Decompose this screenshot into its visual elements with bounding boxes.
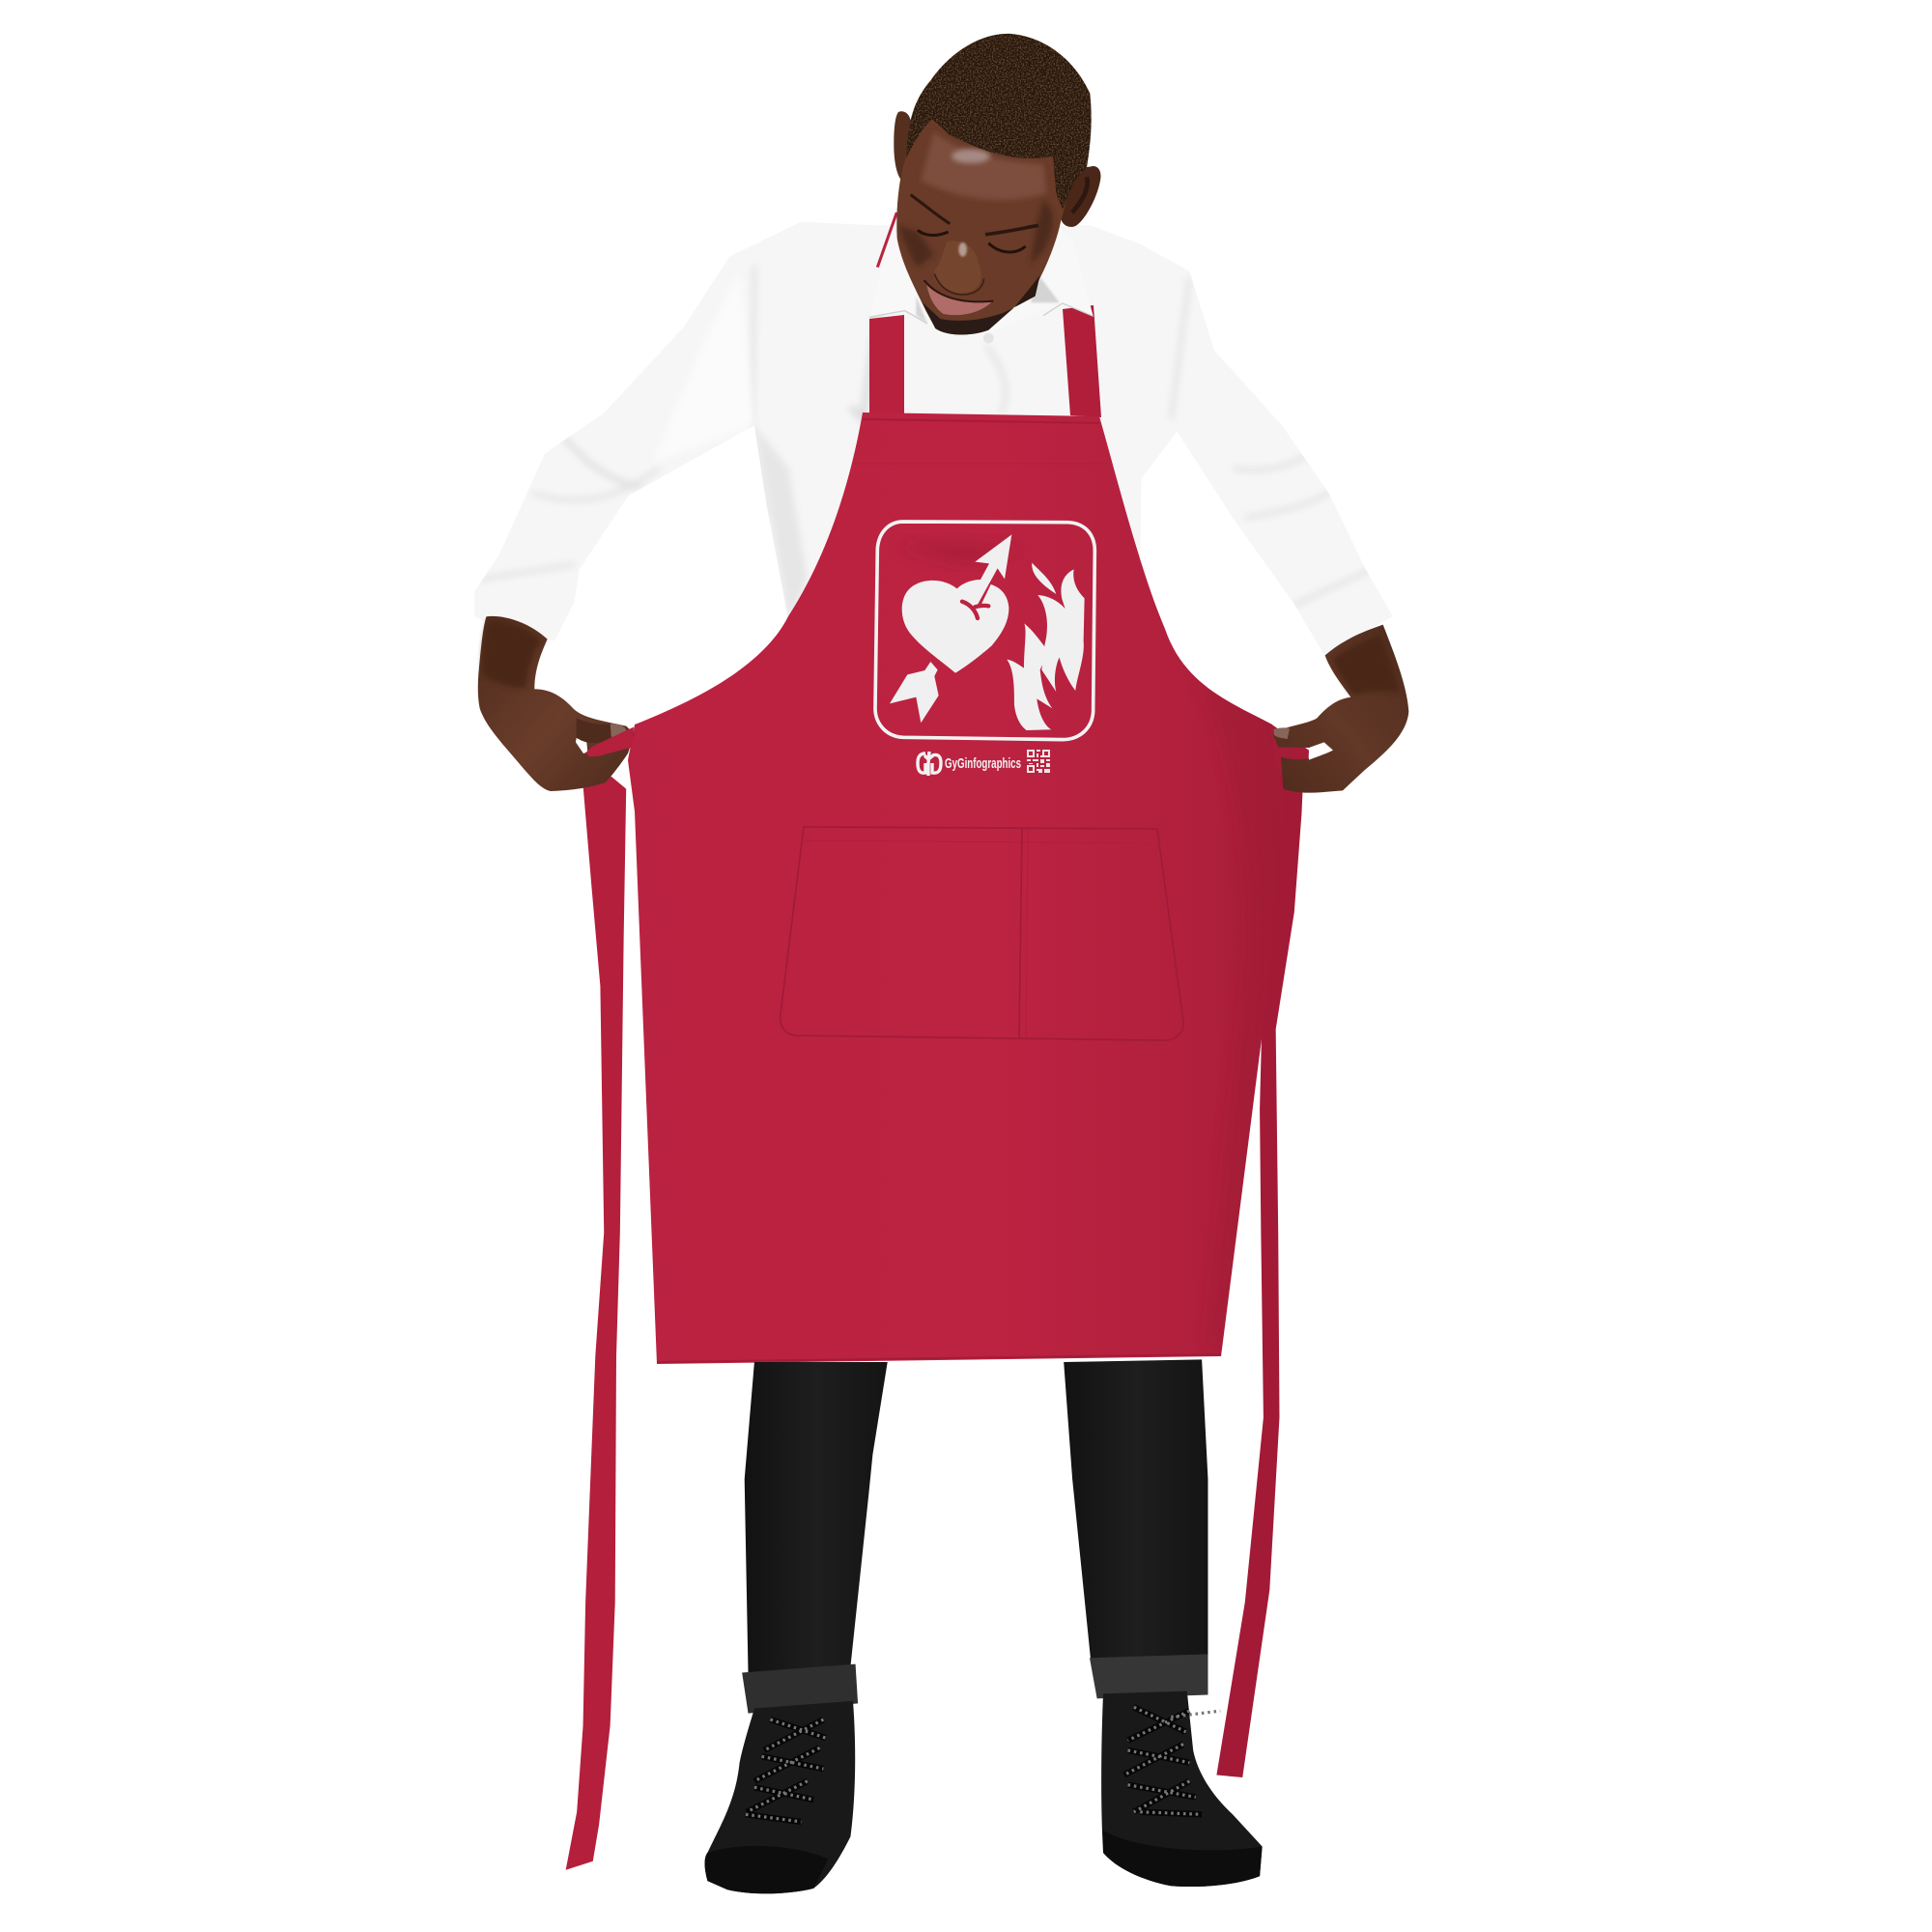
black lace-up boots [705,1691,1263,1893]
left forearm and hand [478,616,635,791]
apron neck straps [869,305,1101,417]
strap pulled through the fingers [1272,724,1309,775]
mouth [926,285,992,315]
boot laces [746,1707,1202,1822]
chest print: heart, arrow and flames [875,522,1094,740]
hair [906,34,1092,210]
left ear [894,111,911,182]
neck shadow [1014,275,1040,307]
cuff seams [478,564,575,580]
eyebrows and closed eyes [911,195,950,224]
fabric shading [898,542,1294,1356]
apron pocket [781,827,1183,1040]
right ear [1061,166,1101,227]
heart pierced by arrow [902,534,1011,673]
apron bottom hem [657,1354,1221,1362]
apron body [628,412,1294,1364]
flames [1007,563,1085,730]
right forearm and hand [1272,625,1408,793]
face [896,116,1069,334]
product photo: man holding out a red apron [475,33,1408,1893]
top hem stitching [863,419,1099,423]
strap pulled through the fingers [585,727,634,756]
beard [923,302,1014,334]
logo mark [918,752,941,776]
black jeans [742,1359,1208,1714]
apron waist ties [566,758,1304,1870]
shirt collar [869,208,1094,343]
brand line: logo mark, wordmark and QR code [918,750,1050,776]
forehead highlight [921,132,1046,200]
rolled jeans cuffs [742,1664,858,1714]
wordmark: GyGinfographics [945,755,1021,772]
rounded frame [875,522,1094,740]
man's head [894,34,1101,334]
cheek and nose [898,225,934,268]
white shirt [474,222,1393,655]
arrow fletch lines [962,602,988,618]
thin neck strap [877,213,896,268]
QR code [1027,750,1050,773]
arrow tail [890,662,939,723]
shirt folds and shadows [478,265,1371,622]
